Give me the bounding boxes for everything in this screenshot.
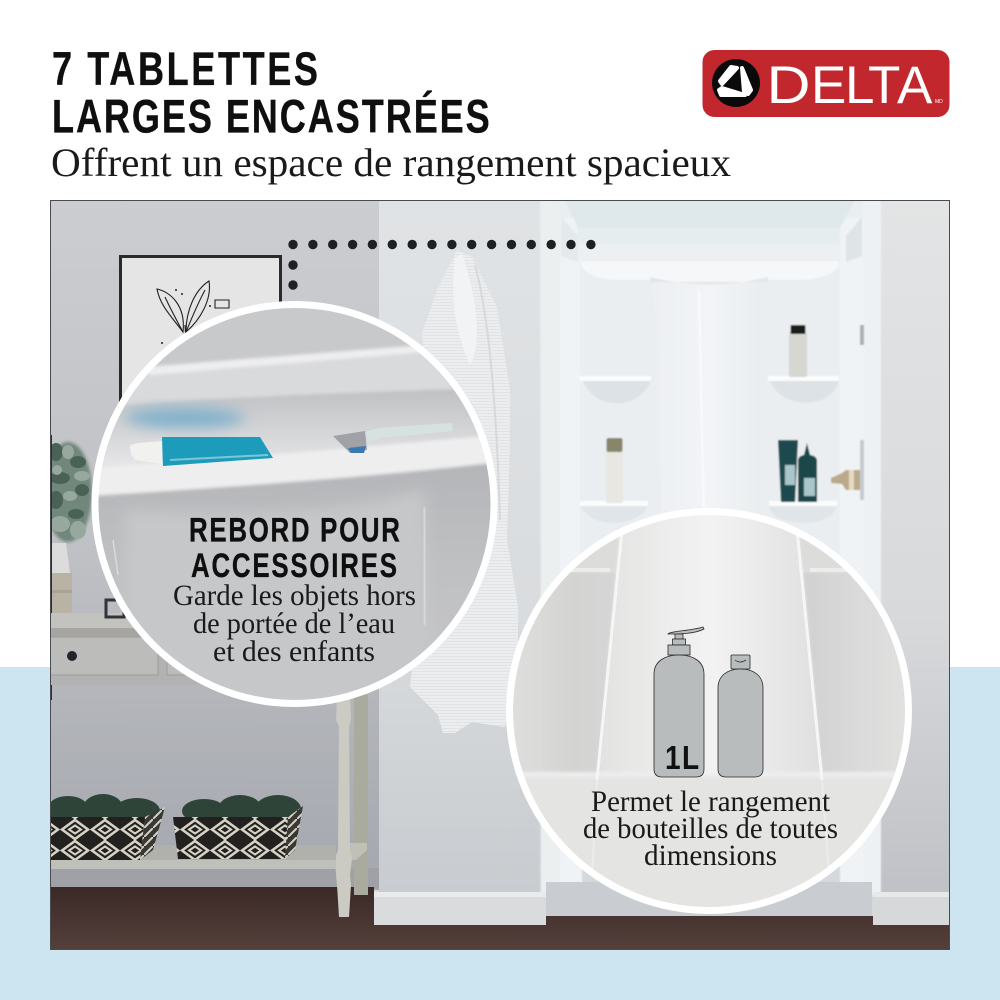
panel: accessory ledge callout <box>90 300 500 710</box>
console table <box>51 598 202 685</box>
table legs <box>335 695 368 917</box>
low shelf <box>50 845 336 869</box>
bottle size label: 1 <box>665 740 681 777</box>
callout body <box>584 790 837 866</box>
logo: Delta: D <box>766 56 811 115</box>
logo: Delta: E <box>811 56 846 115</box>
plant <box>51 435 93 700</box>
callout body: dimensions <box>644 839 777 872</box>
clear bottle <box>789 325 807 377</box>
back wall panel <box>582 436 840 555</box>
bottle size label <box>666 746 698 769</box>
shelf: top <box>582 262 838 281</box>
photo: bathroom scene <box>44 200 950 950</box>
logo: Delta <box>702 50 950 117</box>
callout body <box>174 584 415 662</box>
logo: Delta: A <box>897 56 933 115</box>
center panel <box>650 280 768 600</box>
right wall <box>878 200 950 895</box>
plant pot <box>52 543 72 618</box>
rolled green towels <box>48 794 301 824</box>
razor <box>333 423 453 453</box>
middle wall <box>379 200 544 895</box>
shower surround <box>540 200 881 895</box>
callout body: et des enfants <box>213 635 375 668</box>
logo: Delta: MD <box>935 99 943 105</box>
callout heading: ACCESSOIRES <box>191 548 397 585</box>
callout body: de bouteilles de toutes <box>583 812 838 845</box>
towel <box>410 250 518 733</box>
title: 7 TABLETTES <box>52 42 318 95</box>
callout heading <box>190 518 400 578</box>
bottle size label: L <box>682 740 699 777</box>
panel: bottle storage callout <box>505 505 915 917</box>
subtitle: Offrent un espace de rangement spacieux <box>51 140 731 185</box>
callout body: Garde les objets hors <box>173 579 416 612</box>
baseboards <box>51 868 949 916</box>
photo edge <box>50 200 950 950</box>
dotted connector <box>288 240 596 290</box>
title <box>52 42 490 143</box>
toothpaste tube <box>130 437 273 466</box>
baskets <box>50 806 303 860</box>
logo: Delta: L <box>845 56 874 115</box>
logo: Delta: T <box>868 56 900 115</box>
floor <box>50 887 950 950</box>
green bottles <box>778 440 817 502</box>
callout body: Permet le rangement <box>591 785 831 818</box>
shelves: middle <box>584 382 650 403</box>
blue reflection <box>125 408 245 428</box>
door handle <box>831 470 860 490</box>
icon: pump bottle <box>654 627 704 777</box>
left wall <box>50 200 379 890</box>
shelves: lower <box>580 501 648 506</box>
olive bottle <box>606 438 623 503</box>
picture frame <box>120 256 280 406</box>
callout body: de portée de l’eau <box>193 607 395 640</box>
background: light blue band <box>0 667 1000 1000</box>
title: LARGES ENCASTRÉES <box>52 90 490 143</box>
callout heading: REBORD POUR <box>189 512 400 549</box>
icon: flip-cap bottle <box>718 655 763 777</box>
